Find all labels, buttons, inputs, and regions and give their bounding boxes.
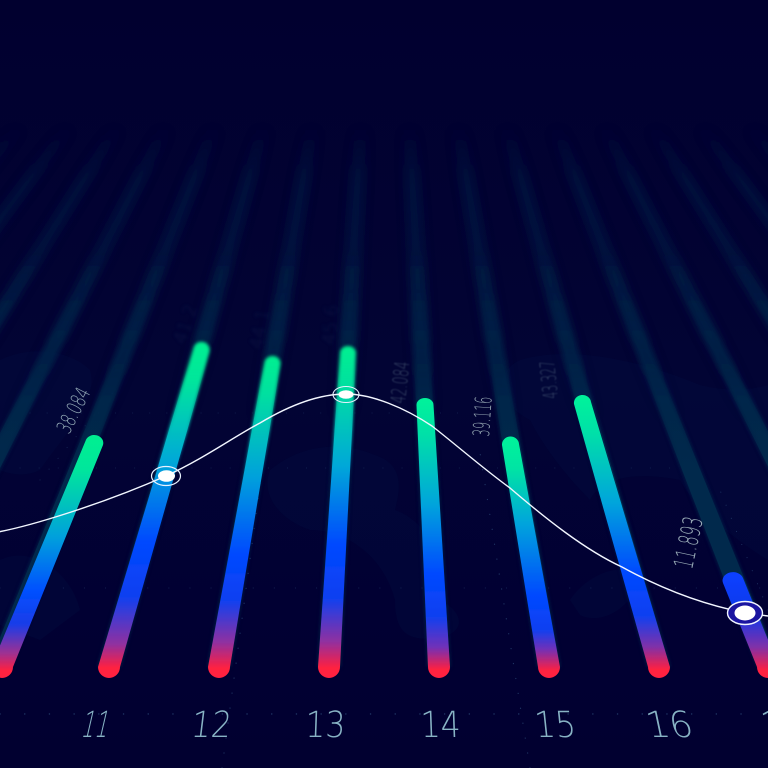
bar 16	[574, 395, 670, 678]
blurred distant labels	[170, 302, 343, 351]
data point marker 17	[728, 602, 762, 624]
bar 17	[723, 572, 768, 678]
axis label 13: 13	[305, 705, 346, 746]
axis label 16: 16	[642, 703, 697, 746]
axis label 15: 15	[533, 704, 578, 746]
bar 13	[318, 346, 356, 678]
bar 15	[502, 436, 560, 678]
axis label 14: 14	[420, 705, 461, 746]
value label 39.116: 39.116	[469, 396, 498, 437]
data point marker 12	[152, 466, 180, 486]
axis label 12: 12	[189, 703, 234, 746]
dotted grid	[0, 390, 768, 768]
axis labels	[78, 703, 768, 746]
blurred distant labels: 41.2	[170, 302, 202, 347]
background rails fading to the horizon	[0, 130, 768, 667]
bar 12	[98, 342, 210, 678]
line curve	[0, 394, 768, 616]
bar 14	[416, 398, 450, 678]
blurred distant labels: 44.1	[246, 308, 274, 351]
axis label 11: 11	[78, 703, 115, 746]
blurred distant labels: 45.6	[319, 304, 343, 345]
chart: perspective bar chart	[0, 156, 768, 768]
bar 11	[0, 435, 103, 678]
value label 43.327: 43.327	[535, 360, 563, 400]
bar 12b	[208, 356, 281, 678]
value label 11.893: 11.893	[669, 514, 710, 571]
value label 38.084: 38.084	[52, 384, 95, 437]
value label 42.084: 42.084	[386, 360, 414, 405]
world map silhouette	[0, 351, 768, 640]
data point marker 13	[333, 386, 359, 402]
